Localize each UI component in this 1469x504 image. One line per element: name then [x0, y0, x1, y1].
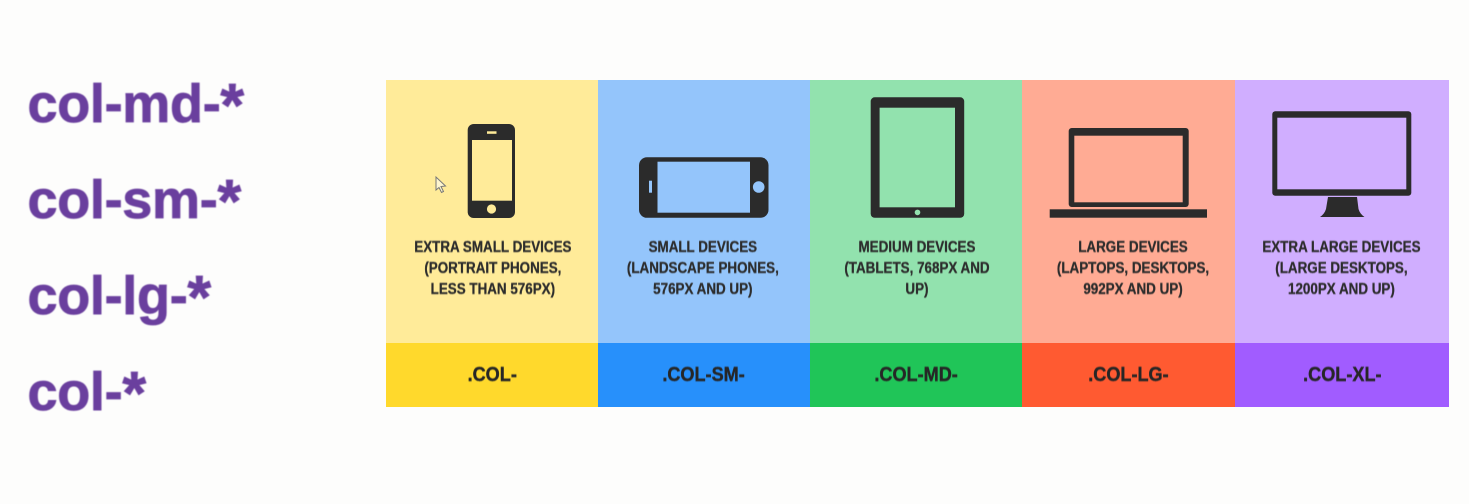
text: small devices: SMALL DEVICES	[649, 238, 757, 256]
band: col-sm: .COL-SM-	[663, 364, 745, 386]
icon: laptop	[1050, 128, 1207, 218]
panel: small	[598, 80, 810, 343]
icon: mouse cursor	[436, 177, 446, 192]
text: extra large devices	[1262, 238, 1420, 298]
band: col: .COL-	[467, 364, 517, 386]
band: col	[386, 343, 598, 407]
text: extra large devices: (LARGE DESKTOPS,	[1275, 260, 1407, 277]
text: extra small devices	[414, 238, 571, 298]
text: extra small devices: (PORTRAIT PHONES,	[424, 260, 561, 277]
label: col-sm: col-sm-*	[28, 167, 241, 235]
text: medium devices	[844, 238, 990, 298]
text: small devices: (LANDSCAPE PHONES,	[627, 260, 779, 277]
text: medium devices: (TABLETS, 768PX AND	[844, 260, 990, 277]
text: large devices: LARGE DEVICES	[1078, 238, 1187, 256]
panel: large	[1022, 80, 1235, 343]
panel: extra small	[386, 80, 598, 343]
band: col-lg	[1022, 343, 1235, 407]
text: large devices: 992PX AND UP)	[1083, 281, 1182, 298]
text: extra small devices: EXTRA SMALL DEVICES	[414, 238, 571, 256]
text: extra large devices: 1200PX AND UP)	[1288, 281, 1394, 298]
icon: portrait phone	[468, 124, 515, 218]
label: col: col-*	[28, 359, 146, 427]
panel: medium	[810, 80, 1022, 343]
panel: extra large	[1235, 80, 1449, 343]
text: extra large devices: EXTRA LARGE DEVICES	[1262, 238, 1420, 256]
text: small devices: 576PX AND UP)	[653, 281, 753, 298]
text: medium devices: MEDIUM DEVICES	[859, 238, 975, 256]
band: col-md: .COL-MD-	[874, 364, 958, 386]
band: col-xl: .COL-XL-	[1303, 364, 1381, 386]
text: large devices	[1056, 238, 1209, 298]
text: extra small devices: LESS THAN 576PX)	[430, 281, 555, 298]
band: col-lg: .COL-LG-	[1088, 364, 1169, 386]
band: col-xl	[1235, 343, 1449, 407]
text: large devices: (LAPTOPS, DESKTOPS,	[1056, 260, 1209, 277]
icon: tablet	[871, 97, 964, 218]
band: col-md	[810, 343, 1022, 407]
label: col-md: col-md-*	[28, 71, 244, 139]
icon: desktop monitor	[1272, 111, 1411, 217]
text: medium devices: UP)	[905, 281, 929, 298]
icon: landscape phone	[639, 157, 768, 218]
label: col-lg: col-lg-*	[28, 263, 211, 331]
text: small devices	[627, 238, 779, 298]
band: col-sm	[598, 343, 810, 407]
